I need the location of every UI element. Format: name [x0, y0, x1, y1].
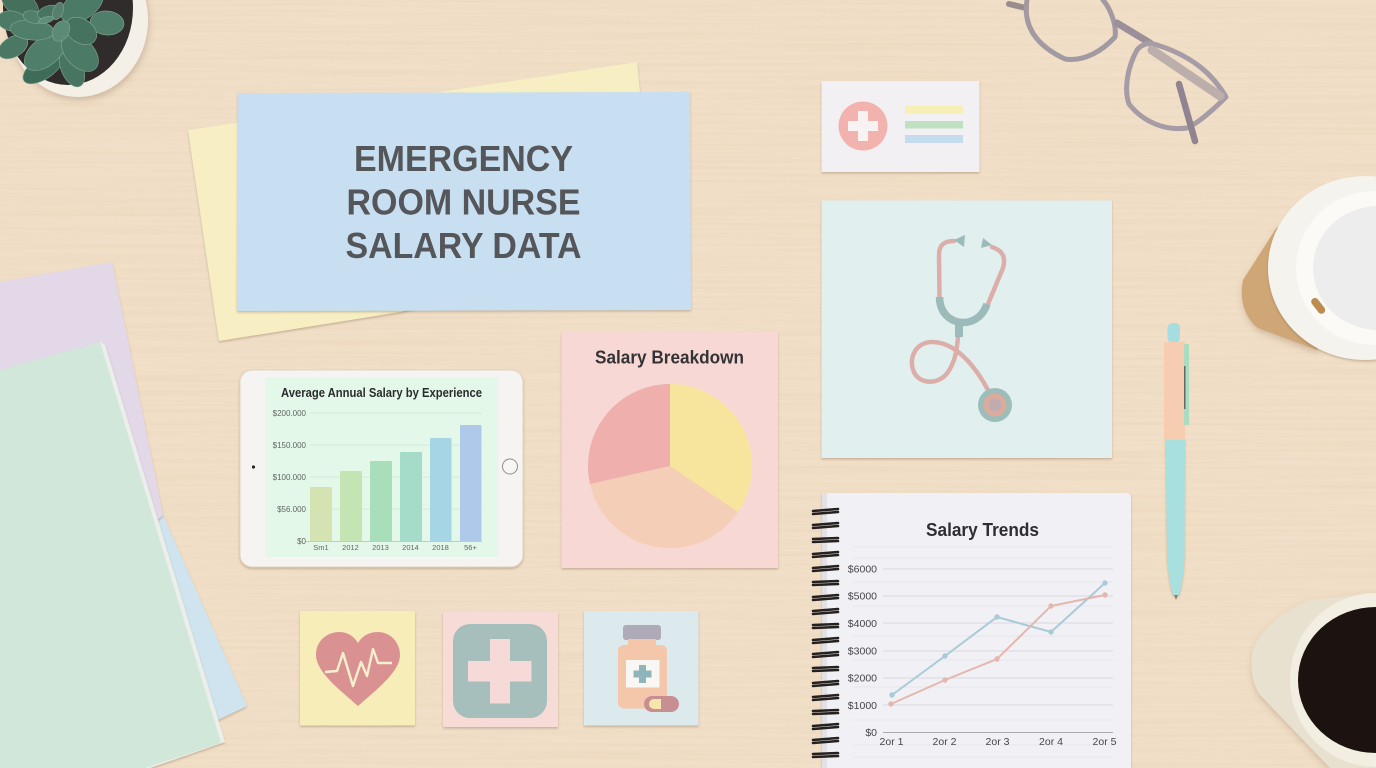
upper barrel — [1164, 342, 1185, 440]
heading: Salary Breakdown — [595, 348, 744, 368]
icon: medicine bottle — [618, 625, 679, 712]
sticky note: medicine bottle — [584, 611, 698, 726]
bar chart: $56.000 — [277, 505, 307, 514]
blue title card — [237, 92, 691, 311]
line chart: 2or 1 — [880, 736, 904, 748]
icon: medical cross badge — [838, 102, 888, 150]
screen — [265, 377, 498, 557]
soil — [3, 0, 133, 85]
bar chart — [273, 409, 482, 552]
bar chart: $0 — [297, 537, 307, 546]
icon: capsule — [644, 696, 679, 712]
green folder — [0, 342, 221, 768]
title: SALARY DATA — [346, 225, 582, 266]
blue sheet — [150, 505, 247, 740]
bar chart: 2012 — [342, 543, 359, 552]
line chart — [848, 547, 1117, 757]
line chart: $5000 — [848, 590, 877, 602]
camera — [252, 465, 255, 469]
sip hole — [1310, 296, 1327, 315]
bar chart: $200.000 — [273, 409, 307, 418]
white edge of green folder — [0, 342, 225, 768]
right lens rim — [1127, 43, 1226, 129]
coffee mug — [1251, 593, 1376, 768]
panel: stethoscope — [822, 200, 1112, 458]
tablet with bar chart — [240, 370, 523, 567]
stacked folders — [0, 262, 247, 768]
line chart: $1000 — [848, 700, 877, 712]
mug body — [1251, 593, 1376, 768]
line chart: 2or 3 — [986, 736, 1010, 748]
line chart: $4000 — [848, 618, 877, 630]
lid recess — [1313, 206, 1376, 330]
binding strip — [822, 493, 827, 768]
lid inner ring — [1296, 191, 1376, 345]
line chart: $2000 — [848, 672, 877, 684]
notebook — [813, 493, 1131, 768]
title: EMERGENCY — [354, 138, 573, 179]
line chart: 2or 5 — [1093, 736, 1117, 748]
clip — [1184, 344, 1189, 425]
line chart: $3000 — [848, 646, 877, 658]
lower barrel — [1166, 439, 1185, 595]
yellow backing sheet — [188, 62, 640, 341]
kraft sleeve — [1242, 227, 1340, 350]
home button — [502, 459, 518, 474]
title — [346, 138, 582, 266]
mug rim — [1290, 593, 1376, 767]
tip — [1174, 595, 1178, 600]
bar chart: 56+ — [464, 543, 477, 552]
bar chart: 2018 — [432, 543, 449, 552]
clip slot — [1184, 366, 1186, 409]
takeaway coffee cup — [1242, 176, 1376, 360]
bar chart: 2013 — [372, 543, 389, 552]
bridge — [1117, 23, 1150, 43]
icon: heart with pulse — [316, 632, 400, 706]
bar chart: 2014 — [402, 543, 419, 552]
icon: cross — [453, 624, 547, 718]
bar chart: $150.000 — [273, 441, 307, 450]
pen — [1164, 323, 1189, 600]
line chart: $0 — [865, 727, 877, 739]
pink series — [889, 593, 1107, 706]
sticky note: medical cross — [443, 612, 558, 727]
colour bars — [905, 106, 963, 143]
small medical card — [822, 81, 980, 172]
potted succulent — [0, 0, 148, 97]
sticky note: heart — [300, 611, 415, 726]
folded temple arm — [1152, 50, 1220, 96]
coffee — [1298, 607, 1376, 753]
title card group — [188, 62, 691, 341]
tablet body — [240, 370, 523, 567]
title: ROOM NURSE — [346, 182, 580, 222]
bar chart: $100.000 — [273, 473, 307, 482]
icon: stethoscope — [912, 235, 1012, 422]
spiral binding — [813, 509, 838, 757]
succulent leaves — [0, 0, 125, 91]
left temple stub — [1009, 4, 1026, 8]
lid — [1268, 176, 1376, 360]
line chart: $6000 — [848, 564, 877, 576]
panel: salary breakdown — [562, 332, 778, 568]
lavender sheet — [0, 262, 163, 522]
page — [822, 493, 1131, 768]
reading glasses — [1009, 0, 1226, 141]
plant pot — [8, 0, 148, 97]
bar chart: Sm1 — [313, 543, 329, 552]
line chart: 2or 2 — [933, 736, 957, 748]
left lens rim — [1026, 0, 1115, 59]
heading: Salary Trends — [926, 520, 1039, 540]
pie chart — [588, 384, 752, 548]
line chart: 2or 4 — [1039, 736, 1063, 748]
pink card — [562, 332, 778, 568]
clicker — [1168, 323, 1180, 343]
blue series — [890, 581, 1107, 697]
chart title: Average Annual Salary by Experience — [281, 386, 482, 400]
